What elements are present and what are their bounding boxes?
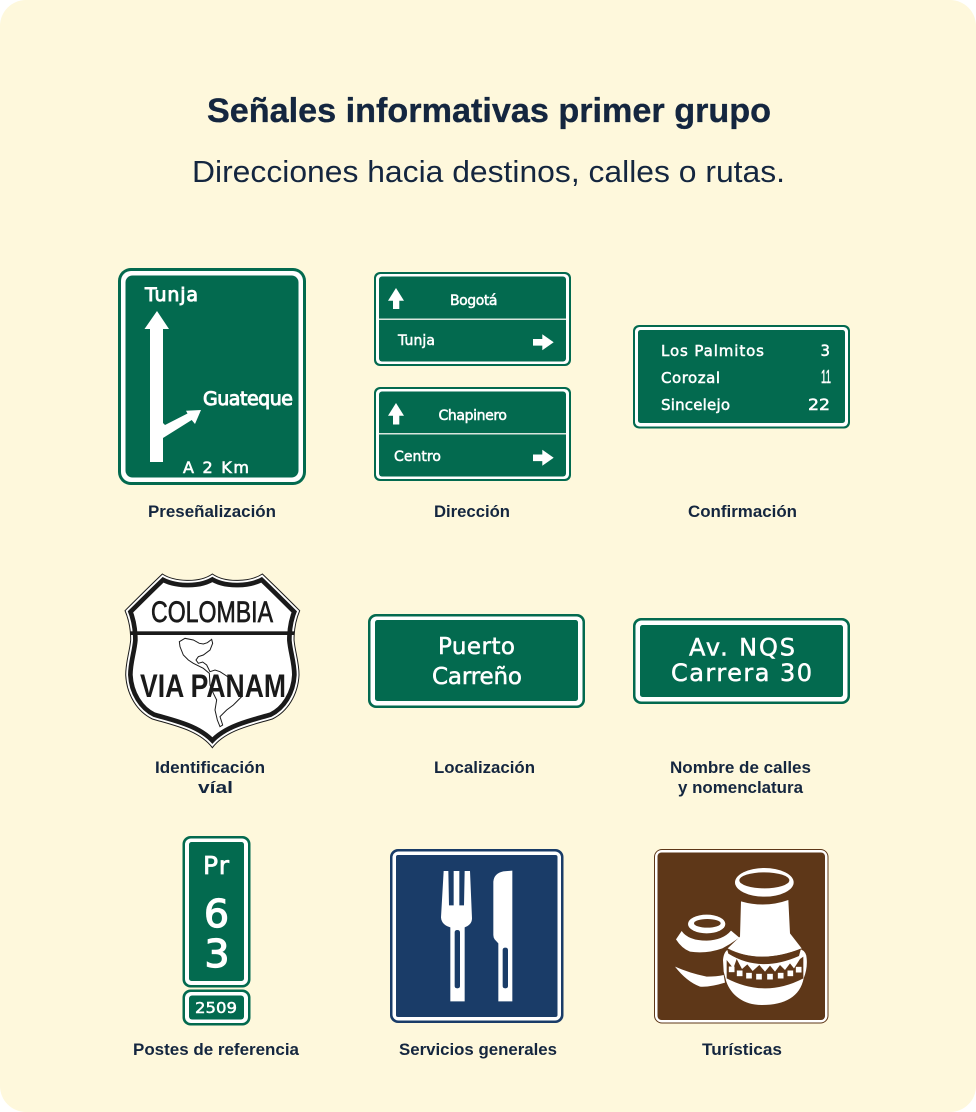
panel: identificación víal <box>124 573 300 793</box>
sign: shield: VIA PANAM <box>140 668 286 704</box>
sign: distances: Los Palmitos <box>661 342 764 360</box>
sign: distances: 22 <box>808 395 830 414</box>
sign: 2509 plate <box>182 990 250 1026</box>
sign: Bogotá / Tunja: Tunja <box>397 333 435 349</box>
sign: distances: 3 <box>820 341 830 360</box>
sign: Av. NQS Carrera 30 <box>633 618 850 704</box>
sign: Puerto Carreño: Carreño <box>432 664 522 690</box>
sign: Puerto Carreño <box>368 614 585 708</box>
icon: fork and knife <box>441 871 512 1001</box>
panel: preseñalización <box>118 268 306 521</box>
sign: Pr 63 post: Pr <box>203 851 230 880</box>
icon: map of the Americas <box>179 638 242 727</box>
icon: ceramic vessels <box>675 868 807 1005</box>
subtitle: Direcciones hacia destinos, calles o rutas. <box>192 154 785 189</box>
sign: distances: Corozal <box>661 369 720 387</box>
label: Servicios generales <box>399 1040 557 1059</box>
sign: distances <box>633 325 850 428</box>
sign: Chapinero / Centro: Chapinero <box>438 408 507 424</box>
label <box>670 758 811 797</box>
sign: preseñalización: A 2 Km <box>183 458 249 477</box>
label: Identificación <box>155 758 265 777</box>
title: Señales informativas primer grupo <box>207 92 771 130</box>
sign: Chapinero / Centro: Centro <box>394 449 441 465</box>
label: Localización <box>434 758 535 777</box>
sign: preseñalización: Tunja <box>144 284 198 306</box>
sign: distances: Sincelejo <box>661 396 730 414</box>
sign: shield: COLOMBIA <box>151 596 273 629</box>
sign: restaurant <box>390 849 564 1023</box>
panel: postes de referencia <box>133 836 300 1059</box>
sign: pottery <box>654 849 828 1024</box>
panel: confirmación <box>633 325 850 521</box>
label: Preseñalización <box>148 502 276 521</box>
panel: dirección <box>374 272 571 521</box>
sign: Bogotá / Tunja: Bogotá <box>450 293 498 309</box>
sign: Chapinero / Centro <box>374 387 571 481</box>
panel: nombre de calles <box>633 618 850 797</box>
label: Dirección <box>434 502 510 521</box>
panel: servicios generales <box>390 849 564 1059</box>
sign: preseñalización: Guateque <box>203 388 293 410</box>
sign: Puerto Carreño: Puerto <box>438 634 515 660</box>
sign: distances: 11 <box>821 367 831 387</box>
label: víal <box>198 778 233 797</box>
sign: preseñalización <box>118 268 306 485</box>
sign: Av. NQS Carrera 30: Carrera 30 <box>671 659 812 687</box>
sign: Pr 63 post: 3 <box>204 932 230 976</box>
panel: turísticas <box>654 849 828 1059</box>
panel: localización <box>368 614 585 777</box>
sign: 2509 plate: 2509 <box>195 999 237 1017</box>
label <box>155 758 265 797</box>
sign: shield <box>116 574 309 748</box>
sign: Pr 63 post <box>182 836 250 988</box>
label: Confirmación <box>688 502 797 521</box>
label: Nombre de calles <box>670 758 811 777</box>
icon: branching arrow <box>144 311 201 462</box>
label: Postes de referencia <box>133 1040 300 1059</box>
sign: Bogotá / Tunja <box>374 272 571 366</box>
sign: Av. NQS Carrera 30: Av. NQS <box>689 634 795 662</box>
label: y nomenclatura <box>678 778 804 797</box>
label: Turísticas <box>702 1040 782 1059</box>
sign: Pr 63 post: 6 <box>204 892 229 936</box>
